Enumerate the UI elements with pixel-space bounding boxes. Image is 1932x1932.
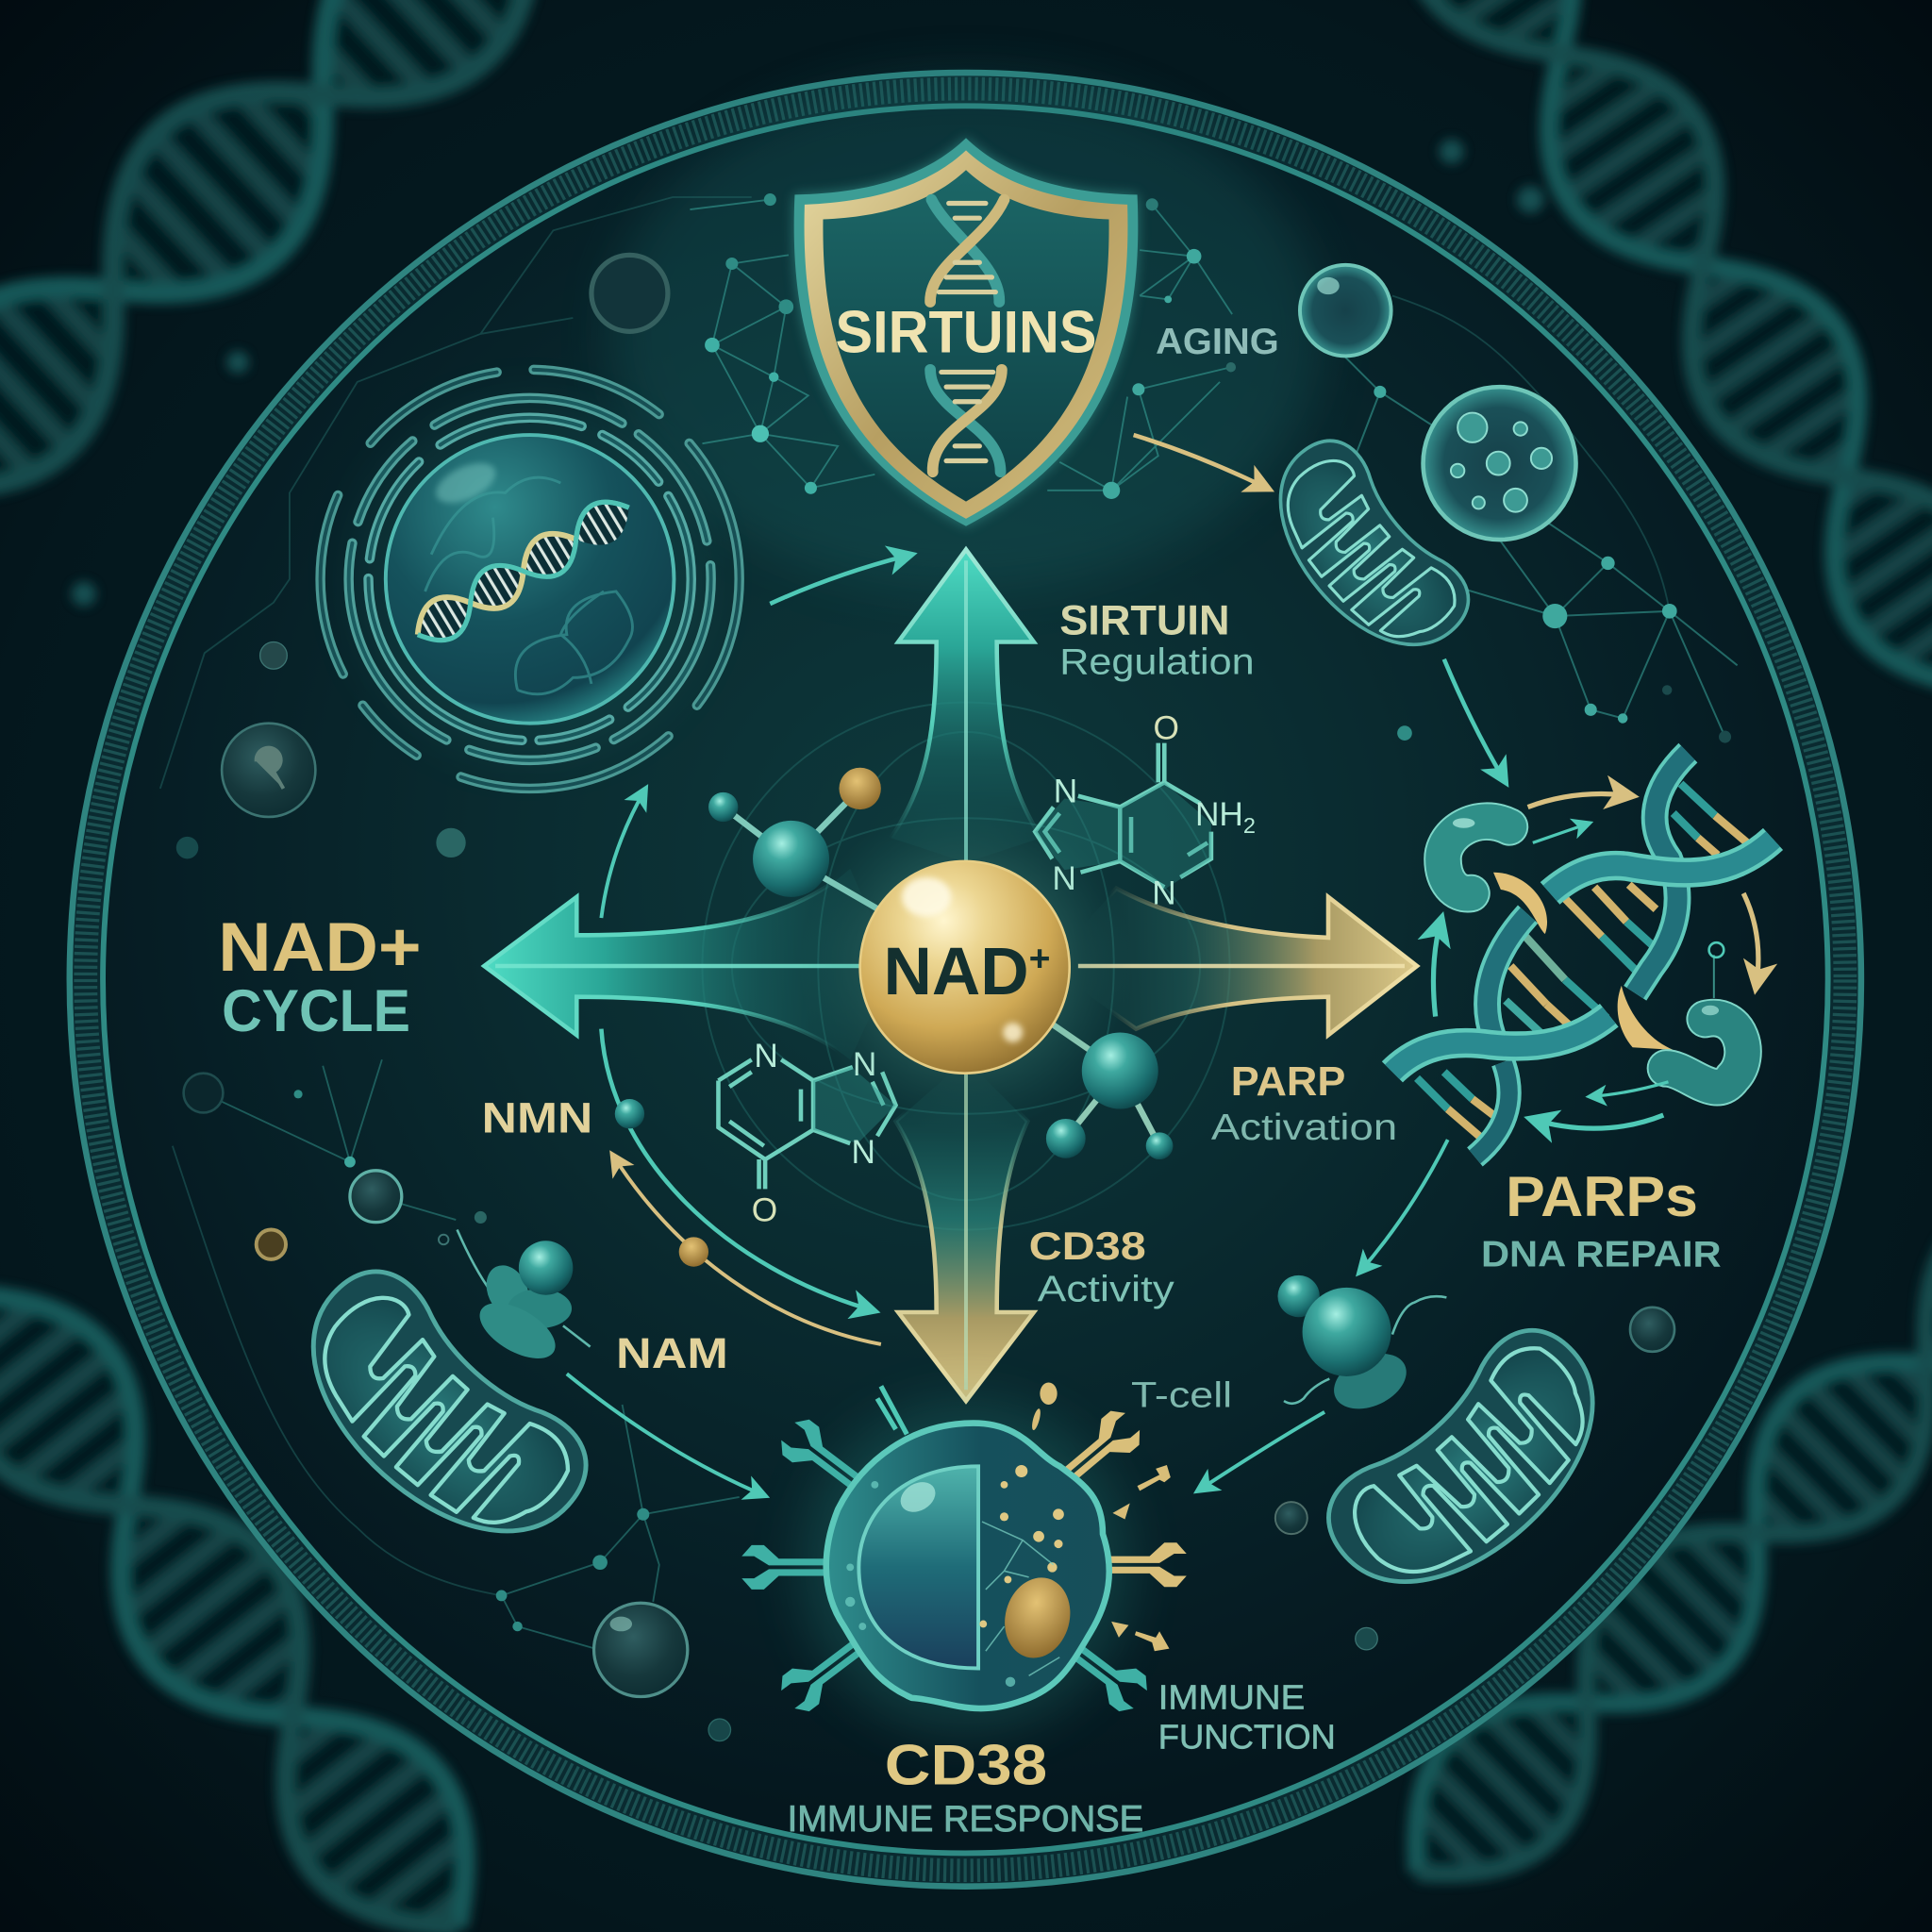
enzyme blob right <box>1666 942 1743 1087</box>
labels: PARP activation: Activation <box>1211 1108 1397 1148</box>
labels: CD38 activity: Activity <box>1038 1269 1174 1309</box>
T-cell gold particles <box>1030 1382 1171 1651</box>
label: T-cell: T-cell <box>1131 1376 1232 1416</box>
chemical structure upper right <box>1035 710 1256 912</box>
arrow: mitochondrion to DNA repair <box>1444 659 1506 782</box>
network lines around shield <box>690 193 1236 499</box>
molecule lower right <box>1041 1017 1173 1159</box>
arrow: up to Sirtuins <box>891 550 1041 862</box>
shield DNA <box>930 200 1004 472</box>
chemical structure lower left: N <box>853 1046 876 1083</box>
mitochondrion bottom right <box>1308 1310 1639 1629</box>
chemical structure lower left <box>718 1038 896 1228</box>
chemical structure upper right: NH <box>1195 796 1243 833</box>
nucleus with DNA <box>321 370 740 789</box>
chemical structure upper right: 2 <box>1243 813 1256 838</box>
labels: PARP activation: PARP <box>1231 1059 1345 1105</box>
chemical structure upper right: O <box>1154 710 1179 747</box>
label: Immune function: FUNCTION <box>1158 1717 1336 1756</box>
heading: PARPs DNA repair: DNA REPAIR <box>1481 1235 1722 1275</box>
arrow: down to CD38 <box>896 1059 1034 1401</box>
arrow: left to NAD+ cycle <box>484 869 893 1059</box>
T-cell <box>741 1386 1187 1734</box>
chemical structure upper right: N <box>1054 773 1077 809</box>
molecule upper left <box>708 768 893 918</box>
central NAD+ sphere: NAD <box>883 934 1029 1009</box>
mitochondrion bottom left <box>266 1251 607 1580</box>
mitochondrion top right <box>1244 425 1483 679</box>
labels: Sirtuin regulation <box>1059 598 1255 682</box>
heading: NAD+ cycle <box>218 909 422 1044</box>
arrow: enzyme to T-cell right <box>1198 1412 1324 1491</box>
labels: Sirtuin regulation: SIRTUIN <box>1059 598 1230 644</box>
network lines lower left cluster <box>204 1059 740 1651</box>
center faint circles <box>702 702 1230 1230</box>
label: NAM: NAM <box>616 1329 728 1377</box>
chemical structure upper right: N <box>1152 875 1176 912</box>
heading: CD38 immune response: CD38 <box>885 1733 1047 1796</box>
chemical structure lower left: N <box>852 1134 875 1171</box>
arrow: right to PARPs <box>1047 889 1417 1035</box>
labels: PARP activation <box>1211 1059 1397 1148</box>
arrow: shield to mitochondrion <box>1134 435 1269 490</box>
heading: CD38 immune response: IMMUNE RESPONSE <box>788 1799 1143 1840</box>
floating vesicles and dots <box>176 255 1674 1741</box>
arrow: PARP to lower enzyme <box>1359 1140 1448 1273</box>
shield: Sirtuins <box>794 138 1138 526</box>
label: AGING: AGING <box>1156 322 1279 362</box>
chemical structure lower left: N <box>754 1038 778 1074</box>
DNA repair helix <box>1392 753 1774 1157</box>
vesicle with inner dots <box>1424 387 1576 540</box>
chemical structure upper right: N <box>1052 860 1076 897</box>
chemical structure lower left: O <box>752 1191 777 1228</box>
faint cell filaments <box>160 197 1670 1595</box>
label: NMN: NMN <box>482 1093 592 1141</box>
heading: NAD+ cycle: CYCLE <box>222 978 410 1044</box>
heading: CD38 immune response <box>788 1733 1143 1840</box>
heading: PARPs DNA repair: PARPs <box>1506 1165 1698 1228</box>
enzyme near NAM <box>458 1230 591 1370</box>
labels: Sirtuin regulation: Regulation <box>1059 641 1255 682</box>
labels: CD38 activity <box>1029 1224 1174 1309</box>
repair cycle arrows <box>1433 794 1758 1128</box>
heading: NAD+ cycle: NAD+ <box>218 909 422 986</box>
NAM arc with node <box>612 1155 881 1344</box>
label: Immune function <box>1158 1678 1336 1756</box>
NMN arc with node <box>601 1029 874 1311</box>
label: Immune function: IMMUNE <box>1158 1678 1305 1717</box>
labels: CD38 activity: CD38 <box>1029 1224 1146 1268</box>
central NAD+ sphere: + <box>1029 939 1051 979</box>
arrow: enzyme to T-cell <box>567 1374 765 1496</box>
heading: PARPs DNA repair <box>1481 1165 1722 1275</box>
arrow: nucleus to shield <box>770 555 912 604</box>
enzyme blob left <box>1442 818 1509 893</box>
arrow: up to nucleus <box>601 789 645 918</box>
network lines right cluster <box>1345 358 1738 743</box>
enzyme lower right <box>1277 1275 1446 1420</box>
central NAD+ sphere <box>800 801 1132 1134</box>
heading: SIRTUINS: SIRTUINS <box>836 300 1096 366</box>
